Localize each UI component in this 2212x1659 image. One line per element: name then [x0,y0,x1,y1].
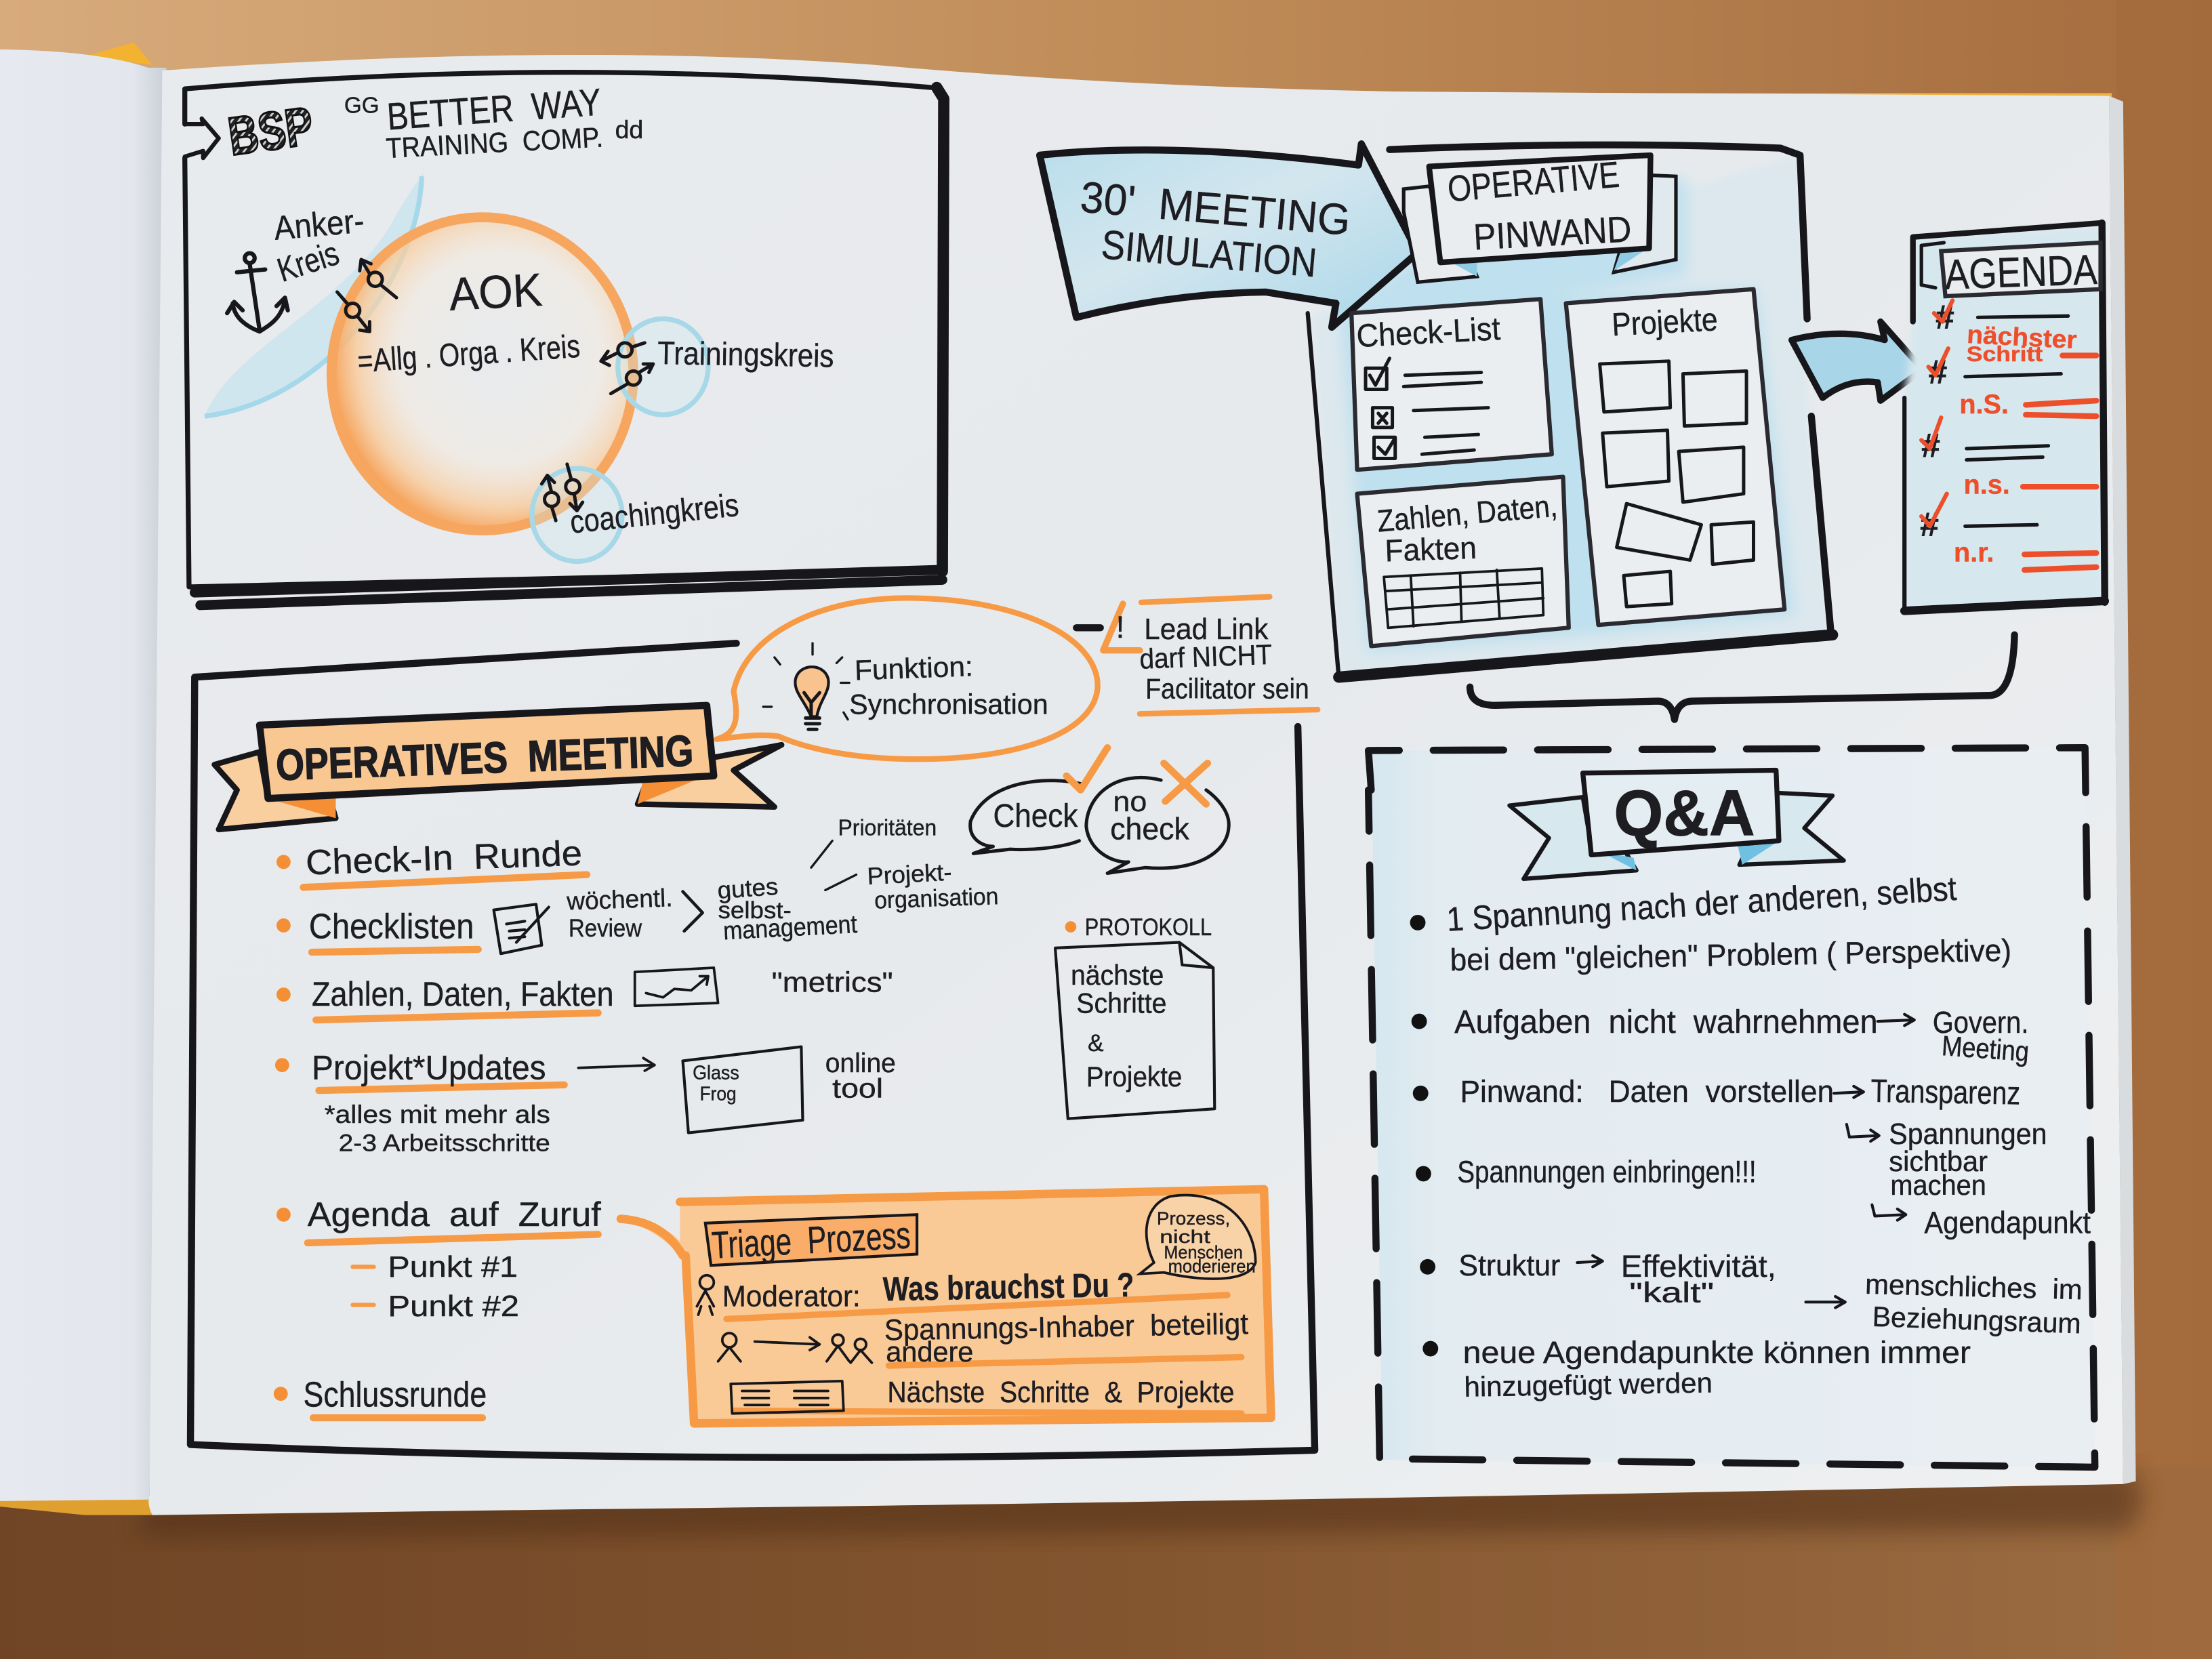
Protokoll note: Schritte [1076,987,1167,1019]
card: check-list: Check-List [1355,311,1501,354]
note bubble: Prozess nicht Menschen moderieren [1140,1195,1256,1279]
note bubble: Prozess nicht Menschen moderieren: Menschen [1164,1242,1243,1263]
list item: Checklisten [276,815,999,954]
agenda items: # [1929,353,1947,391]
agenda items: # [1936,298,1954,336]
question and answer notes: Spannungen [1889,1118,2047,1151]
board frame [1389,145,1831,635]
Anker-Kreis label: Anker- [272,201,366,247]
icon: next steps card [731,1381,844,1414]
panel shadow edge [937,87,944,571]
panel frame [190,643,1315,1458]
question and answer notes: neue Agendapunkte können immer [1463,1335,1971,1370]
question and answer notes: machen [1890,1169,1986,1201]
Protokoll note: PROTOKOLL [1085,914,1212,941]
list item: Checklisten: Checklisten [309,907,474,946]
arrow title text: SIMULATION [1100,221,1319,286]
list item: Projekt Updates: tool [832,1074,883,1104]
company name: dd [615,115,643,144]
Q and A ribbon [1509,771,1844,879]
card: Projekte: Projekte [1611,302,1719,343]
card: Zahlen, Daten, Fakten: Zahlen, Daten, [1376,489,1559,539]
icon: checklist document [494,904,549,954]
arrow into panel [185,119,219,158]
list item: Agenda auf Zuruf [276,1195,601,1323]
AOK orange circle [331,218,634,531]
GlassFrog box [683,1047,802,1133]
agenda header: AGENDA [1944,246,2098,299]
list item: Agenda auf Zuruf: Agenda auf Zuruf [308,1195,601,1233]
speech bubbles: check and no check: no [1113,785,1147,817]
ribbon: operatives Meeting: OPERATIVES MEETING [275,726,694,790]
box: Triage Prozess: andere [886,1336,973,1368]
brace joining board and agenda to Q and A [1470,635,2015,720]
question and answer notes: Effektivität, [1621,1249,1776,1284]
Allg Orga Kreis label: =Allg . Orga . Kreis [356,329,581,380]
Trainingskreis circle [618,319,708,415]
question and answer notes: bei dem "gleichen" Problem ( Perspektive) [1450,933,2011,977]
speech bubbles: check and no check [970,747,1229,874]
question and answer notes [1446,869,2091,1403]
list item: Checklisten: management [722,909,858,945]
box: Triage Prozess: Nächste Schritte & Projekte [887,1376,1234,1409]
next step annotations in red: nächster [1966,320,2078,354]
Ankerkreis blue crescent [205,172,423,416]
card: Zahlen, Daten, Fakten [1357,477,1569,646]
company name: GG [344,94,380,119]
Triage title: Triage Prozess [711,1214,912,1267]
list item: Checklisten: gutes [716,874,779,904]
icon: light bulb [763,643,849,729]
arrow title text: 30' MEETING [1078,172,1353,245]
note bubble: Prozess nicht Menschen moderieren: moderieren [1168,1256,1256,1277]
list item: Check-In Runde: Check-In Runde [305,834,583,883]
question and answer notes: sichtbar [1889,1145,1988,1177]
panel: Q and A [1368,747,2095,1467]
list item: Projekt Updates: online [825,1048,896,1078]
list item: Projekt Updates: *alles mit mehr als [325,1100,550,1128]
speech bubble: Funktion Synchronisation: Synchronisation [849,688,1048,720]
list item: Checklisten: Prioritäten [838,815,937,840]
big arrow: 30 minute meeting simulation [1040,144,1418,327]
agenda items: # [1921,426,1940,464]
question and answer notes: Transparenz [1870,1073,2021,1112]
box: Triage Prozess [621,1188,1273,1425]
question and answer notes: menschliches im [1865,1268,2083,1305]
anchor icon [227,253,288,331]
Protokoll note: & [1088,1030,1104,1057]
dashed frame [1368,747,2095,1467]
arrow to tool [578,1058,655,1071]
list item: Zahlen, Daten, Fakten: "metrics" [772,966,893,998]
board blue fill [1312,155,1830,677]
question and answer notes: Aufgaben nicht wahrnehmen [1454,1004,1878,1040]
icon: persons and arrow [718,1333,872,1363]
panel: BSP Better Way Training Company [185,73,944,605]
arrow: board to agenda [1792,322,1923,401]
card: check-list [1351,299,1552,470]
Trainingskreis label: Trainingskreis [657,335,834,375]
arrow title text [1078,172,1353,286]
question and answer notes: Pinwand: Daten vorstellen [1460,1074,1834,1109]
mini table [1384,569,1543,628]
Coachingkreis label: coachingkreis [569,487,741,541]
role icons on circle borders [337,260,653,520]
warning: lead link not facilitator: Facilitator sein [1145,672,1309,704]
speech bubbles: check and no check: Check [993,798,1078,834]
icon: moderator person [697,1275,714,1315]
Protokoll note: nächste [1071,959,1164,991]
box: Triage Prozess: Moderator: [722,1280,861,1313]
Coachingkreis circle [532,468,622,561]
panel frame [185,73,931,587]
question and answer notes: Agendapunkt [1924,1205,2091,1240]
question and answer notes: "kalt" [1629,1276,1714,1308]
warning: lead link not facilitator [1076,597,1317,714]
list item: Projekt Updates [275,1047,896,1157]
note bubble: Prozess nicht Menschen moderieren: nicht [1160,1227,1211,1247]
company name: TRAINING COMP. [385,121,604,164]
list item: Checklisten: selbst- [718,897,792,924]
Protokoll note [1055,914,1214,1119]
question and answer notes: Spannungen einbringen!!! [1457,1154,1757,1189]
next step annotations in red: n.s. [1964,470,2010,500]
list item: Agenda auf Zuruf: Punkt #1 [388,1250,518,1284]
panel: Agenda [1904,223,2105,612]
card: Projekte [1566,289,1784,625]
speech bubbles: check and no check: check [1110,812,1189,846]
Q and A ribbon: Q&A [1614,777,1755,849]
question and answer notes: hinzugefügt werden [1464,1366,1713,1403]
warning: lead link not facilitator: darf NICHT [1139,638,1273,675]
agenda items: # [1920,506,1939,544]
highlight strokes [726,1295,1242,1414]
list item: Zahlen, Daten, Fakten: Zahlen, Daten, Fakten [312,975,614,1013]
ribbon: operative Pinwand [1404,155,1676,282]
icon: chart [635,968,718,1006]
next step annotations in red: n.r. [1954,537,1994,567]
AOK label: AOK [448,264,544,321]
list item: Projekt Updates: Glass [693,1062,739,1084]
question and answer notes: Struktur [1458,1249,1560,1282]
question and answer notes: Beziehungsraum [1872,1300,2082,1339]
company name [344,81,643,164]
list item: Projekt Updates: Projekt*Updates [312,1048,546,1086]
Anker-Kreis label [272,201,366,289]
BSP label: BSP [224,95,316,167]
list item: Schlussrunde: Schlussrunde [304,1375,487,1414]
Protokoll note: Projekte [1086,1061,1182,1092]
list item: Zahlen, Daten, Fakten [276,966,893,1020]
warning: lead link not facilitator: ! [1116,610,1124,644]
next step annotations in red [1954,320,2096,570]
list item: Agenda auf Zuruf: Punkt #2 [388,1290,519,1323]
question and answer notes: Govern. [1933,1005,2028,1040]
box: Triage Prozess: Was brauchst Du ? [882,1266,1134,1308]
ribbon: operative Pinwand: OPERATIVE [1446,155,1621,210]
card: Zahlen, Daten, Fakten: Fakten [1385,531,1477,568]
list item: Projekt Updates: 2-3 Arbeitsschritte [339,1130,550,1157]
company name: BETTER WAY [386,81,602,138]
panel: 30 minute meeting simulation board [1040,144,1832,677]
speech bubble: Funktion Synchronisation: Funktion: [854,650,974,686]
box: Triage Prozess: Spannungs-Inhaber beteiligt [884,1307,1248,1347]
panel: operatives Meeting [190,597,1317,1458]
question and answer notes: Meeting [1941,1029,2030,1067]
Anker-Kreis label: Kreis [272,234,344,289]
ribbon: operatives Meeting [214,705,781,830]
bullet dots [1410,915,1438,1356]
list item: Checklisten: wöchentl. [566,883,673,916]
list item: Projekt Updates: Frog [699,1084,737,1105]
list item: Checklisten: Projekt- [867,859,952,890]
warning: lead link not facilitator: Lead Link [1144,613,1269,646]
speech bubble: Funktion Synchronisation [716,598,1098,759]
next step annotations in red: n.S. [1959,390,2009,419]
list item: Checklisten: Review [569,914,642,942]
question and answer notes: 1 Spannung nach der anderen, selbst [1446,869,1958,939]
agenda items [1920,298,2068,544]
list item: Checklisten: organisation [874,883,999,914]
next step annotations in red: Schritt [1967,342,2043,366]
note bubble: Prozess nicht Menschen moderieren: Prozess, [1157,1208,1230,1229]
ribbon: operative Pinwand: PINWAND [1473,209,1633,258]
